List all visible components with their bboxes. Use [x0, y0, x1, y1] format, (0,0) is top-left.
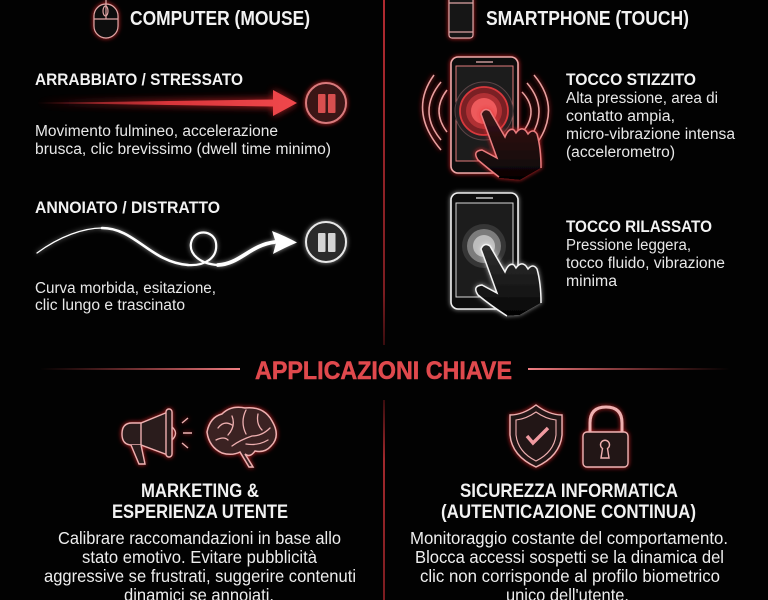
description: sicurezza: Blocca accessi sospetti se la dinamica del [415, 547, 724, 567]
description: marketing: stato emotivo. Evitare pubblicità [82, 547, 317, 567]
hand [476, 245, 541, 316]
touch ripple [462, 224, 506, 268]
description: annoiato: Curva morbida, esitazione, [35, 280, 216, 297]
icon: megaphone [122, 409, 192, 464]
text: tocco rilassato: Pressione leggera, [566, 237, 691, 254]
text: tocco stizzito: micro-vibrazione intensa [566, 126, 735, 143]
description: marketing: aggressive se frustrati, suggerire contenuti [44, 566, 356, 586]
heading: marketing [112, 481, 288, 523]
description: sicurezza: clic non corrisponde al profilo biometrico [420, 566, 720, 586]
icon: shield [510, 405, 562, 467]
icon: brain [207, 407, 276, 467]
text: tocco stizzito: contatto ampia, [566, 108, 675, 125]
description: arrabbiato [35, 123, 331, 158]
phone body [451, 193, 518, 309]
touch ripple [455, 82, 513, 140]
icon: white phone with relaxed touch [451, 193, 541, 316]
panel: computer mouse [35, 0, 346, 314]
text: tocco stizzito: (accelerometro) [566, 144, 675, 161]
text: tocco stizzito: Alta pressione, area di [566, 90, 718, 107]
heading: sicurezza: SICUREZZA INFORMATICA [460, 481, 678, 502]
icon: padlock [583, 407, 628, 467]
description: marketing: Calibrare raccomandazioni in base allo [58, 528, 341, 548]
bottom vertical divider [383, 400, 385, 600]
panel: smartphone touch [423, 0, 735, 316]
section heading: applicazioni chiave: APPLICAZIONI CHIAVE [255, 357, 512, 385]
text: tocco stizzito [566, 70, 735, 161]
description: annoiato [35, 280, 216, 314]
arrow: soft looping white curve [37, 228, 297, 265]
icon: small smartphone [449, 0, 473, 38]
state: arrabbiato heading: ARRABBIATO / STRESSATO [35, 70, 243, 89]
heading: computer: COMPUTER (MOUSE) [130, 8, 310, 30]
heading: marketing: ESPERIENZA UTENTE [112, 502, 288, 523]
icon: white pause button [306, 222, 346, 262]
hand [476, 110, 541, 180]
text: tocco stizzito: TOCCO STIZZITO [566, 70, 696, 89]
panel: sicurezza [410, 405, 728, 600]
top vertical divider [383, 0, 385, 345]
text: tocco rilassato [566, 217, 725, 290]
description: sicurezza [410, 528, 728, 600]
heading: sicurezza [441, 481, 696, 523]
description: arrabbiato: brusca, clic brevissimo (dwell time minimo) [35, 141, 331, 158]
description: annoiato: clic lungo e trascinato [35, 297, 185, 314]
state: annoiato heading: ANNOIATO / DISTRATTO [35, 198, 220, 217]
panel: marketing [44, 407, 356, 600]
icon: red pause button [306, 83, 346, 123]
vibration arcs [423, 75, 549, 150]
description: arrabbiato: Movimento fulmineo, accelerazione [35, 123, 278, 140]
description: sicurezza: Monitoraggio costante del comportamento. [410, 528, 728, 548]
heading: marketing: MARKETING & [141, 481, 259, 502]
text: tocco rilassato: minima [566, 273, 617, 290]
heading: sicurezza: (AUTENTICAZIONE CONTINUA) [441, 502, 696, 523]
description: marketing [44, 528, 356, 600]
icon: red phone with intense touch [423, 57, 549, 180]
heading: smartphone: SMARTPHONE (TOUCH) [486, 8, 689, 30]
text: tocco rilassato: tocco fluido, vibrazione [566, 255, 725, 272]
arrow: fast red movement [37, 90, 297, 116]
icon: mouse [94, 0, 118, 38]
phone body [451, 57, 518, 173]
text: tocco rilassato: TOCCO RILASSATO [566, 217, 712, 236]
